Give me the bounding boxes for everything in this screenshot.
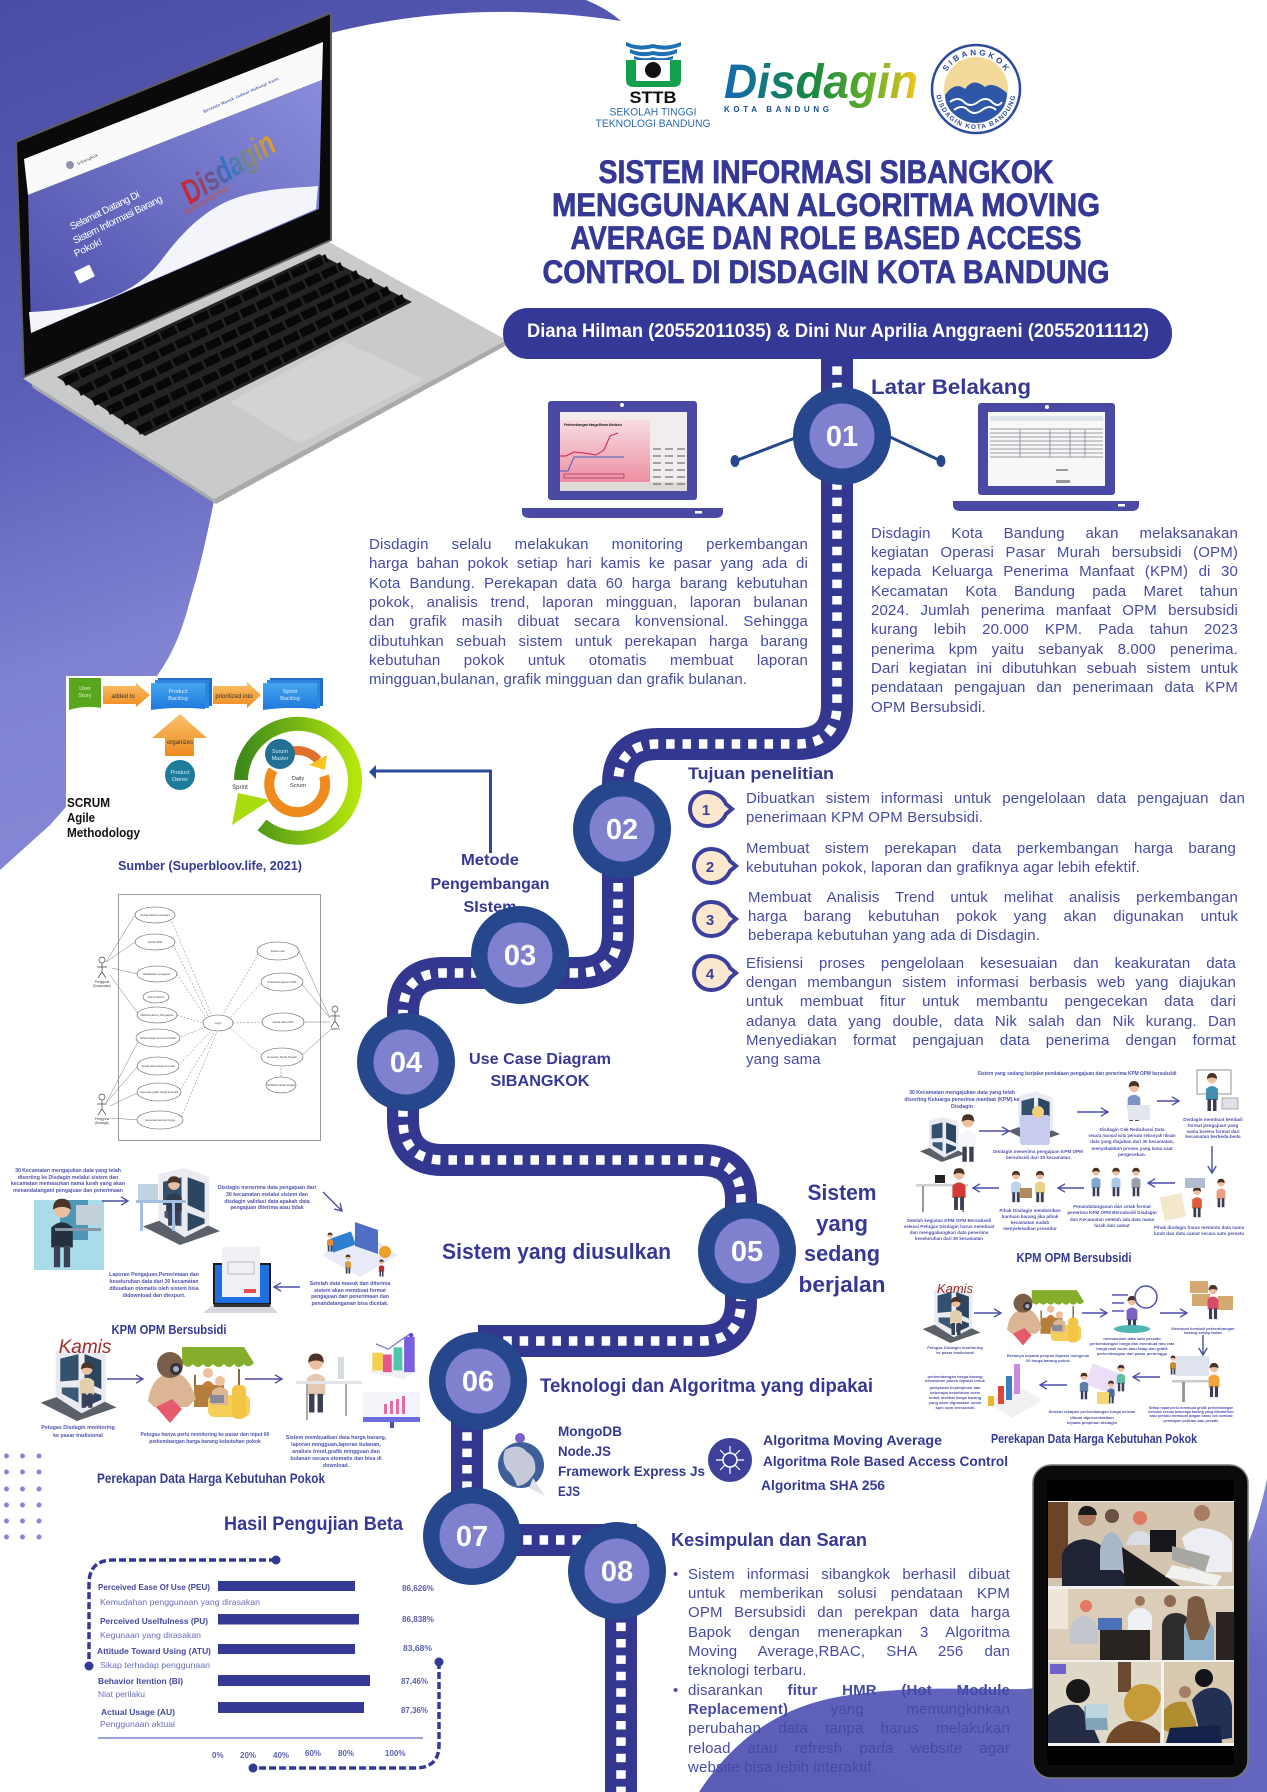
flow panel: running KPM OPM process: Disdagin Cek Redudansi Data <box>1099 1127 1165 1132</box>
diagram: Scrum agile methodology: Backlog <box>168 696 188 702</box>
text block: background right paragraph: OPM Bersubsidi. <box>871 699 986 716</box>
flow panel: proposed KPM OPM system: didownload dan diexport. <box>123 1293 186 1299</box>
bar chart: beta testing results: Kegunaan yang dirasakan <box>100 1630 201 1640</box>
step circle 05 <box>698 1202 796 1300</box>
diagram: Scrum agile methodology: added to <box>111 694 135 700</box>
diagram: Scrum agile methodology: Sprint <box>283 689 298 695</box>
badge 2 <box>694 849 736 883</box>
tech stack list: EJS <box>558 1483 580 1499</box>
step circle 01 <box>793 387 891 485</box>
logo: Sibangkok: SIBANGKOK <box>943 50 1010 72</box>
flow panel: running price recap process: barang setiap bulan <box>1184 1330 1222 1335</box>
heading: Latar Belakang: Latar Belakang <box>871 376 1031 399</box>
step circle 06 <box>429 1332 527 1430</box>
icon: globe <box>498 1433 545 1496</box>
logo: STTB: SEKOLAH TINGGI <box>610 106 696 118</box>
objective 4 text: dengan membangun sistem informasi berbasis web yang diajukan <box>746 974 1236 991</box>
flow panel: proposed KPM OPM system: pengajuan dan penerimaan dan <box>311 1294 389 1300</box>
heading: Metode Pengembangan Sistem <box>430 852 550 916</box>
diagram: use case: kelola harga semua komoditi <box>140 1036 176 1040</box>
text block: background right paragraph: penerima kpm yaitu sebanyak 8.000 penerima. <box>871 641 1238 658</box>
flow panel: running KPM OPM process: selesai Petugas Disdagin harus membuat <box>904 1224 995 1229</box>
flow panel: proposed KPM OPM system: sistem akan membuat format <box>314 1288 386 1294</box>
conclusion bullets: website bisa lebih interaktif. <box>688 1759 876 1776</box>
badge 4: 4 <box>706 966 715 983</box>
flow panel: proposed KPM OPM system: 30 kecamatan melalui sistem dan <box>226 1192 308 1198</box>
flow panel: running price recap process: 60 harga barang pokok <box>1026 1358 1071 1363</box>
diagram: Scrum agile methodology: Master <box>272 756 289 762</box>
text block: background left paragraph: mingguan,bulanan, grafik mingguan dan grafik bulanan. <box>369 671 747 688</box>
tablet with documentation photos <box>1033 1465 1248 1778</box>
flow panel: running price recap process: kembali sesuai beberapa barang yang dibutuhkan <box>1148 1410 1234 1414</box>
objective 3 text: Membuat Analisis Trend untuk melihat analisis perkembangan <box>748 888 1238 906</box>
objective 4 text <box>746 954 1236 1068</box>
step circle 06: 06 <box>462 1366 494 1398</box>
objective 3 text: beberapa kebutuhan yang ada di Disdagin. <box>748 927 1040 944</box>
flow panel: running KPM OPM process <box>904 1070 1245 1265</box>
step circle 05: 05 <box>731 1236 763 1268</box>
bar chart: beta testing results: 60% <box>305 1749 321 1758</box>
step circle 04 <box>357 1013 455 1111</box>
conclusion bullets: Bapok dengan menerapkan 3 Algoritma <box>688 1624 1010 1641</box>
diagram: use case: Kelola data harga komoditi <box>141 1064 175 1068</box>
step circle 04: 04 <box>390 1047 422 1079</box>
flow panel: running KPM OPM process: Setelah kegiatan KPM OPM Bersubsidi <box>907 1218 991 1223</box>
conclusion bullets: perubahan data tanpa harus melakukan <box>688 1720 1010 1737</box>
illustration: laptop mockup <box>16 13 507 504</box>
author pill <box>503 308 1172 359</box>
flow panel: running price recap process: pelayanan kepimpinan dan <box>929 1385 981 1390</box>
flow panel: proposed price recap system <box>40 1333 420 1486</box>
heading: Sistem yang sedang berjalan: berjalan <box>798 1272 886 1297</box>
connector lines from circle 01 <box>730 436 946 467</box>
title: CONTROL DI DISDAGIN KOTA BANDUNG <box>542 254 1110 290</box>
heading: Sistem yang sedang berjalan: yang <box>816 1211 868 1236</box>
step circle 08 <box>568 1522 666 1620</box>
logo: Disdagin: KOTA BANDUNG <box>724 105 829 114</box>
diagram: use case: Generate grafik harga komoditi <box>140 1090 179 1094</box>
bar chart: beta testing results: Actual Usage (AU) <box>101 1707 175 1717</box>
decorative dots <box>4 1454 42 1540</box>
text block: background right paragraph: Kecamatan Kota Bandung pada Maret tahun <box>871 583 1238 600</box>
conclusion bullets: Replacement) yang memungkinkan <box>688 1701 1010 1718</box>
flow panel: proposed price recap system: Sistem membuatkan data harga barang, <box>286 1435 387 1441</box>
step circle 07 <box>423 1487 521 1585</box>
diagram: use case: Login <box>215 1021 222 1025</box>
diagram: use case: Generate laporan harga <box>145 1118 175 1122</box>
flow panel: proposed KPM OPM system: menandatangani pengajuan dan penerimaan <box>13 1188 123 1194</box>
objective 4 text: untuk membuat fitur untuk membantu pengecekan data dari <box>746 993 1236 1010</box>
flow panel: running KPM OPM process: Pihak disdagin harus meminta data nama <box>1154 1225 1245 1230</box>
diagram: Scrum agile methodology: Owner <box>172 777 188 783</box>
flow panel: proposed KPM OPM system: 30 Kecamatan mengajukan data yang telah <box>15 1168 121 1174</box>
objective 3 text: harga barang kebutuhan pokok yang akan digunakan untuk <box>748 908 1238 925</box>
flow panel: running price recap process: Kamis <box>937 1281 974 1296</box>
diagram: use case: (Disdagin) <box>95 1121 109 1125</box>
illustration: laptop mockup: Beranda Masuk Jadwal Hubungi Kami <box>202 76 279 114</box>
flow panel: proposed price recap system: laporan mingguan,laporan bulanan, <box>291 1442 381 1448</box>
diagram: Scrum agile methodology: Agile <box>67 810 95 825</box>
flow panel: running price recap process: Membuat kembali perkembangan <box>1171 1326 1235 1331</box>
heading: Sistem yang diusulkan: Sistem yang diusulkan <box>442 1239 671 1264</box>
flow panel: running price recap process: perekapan polician satu persatu <box>1164 1419 1218 1423</box>
diagram: Scrum agile methodology: Story <box>79 693 92 699</box>
flow panel: running KPM OPM process: kecamatan berbeda-beda <box>1185 1134 1241 1139</box>
heading: Kesimpulan dan Saran: Kesimpulan dan Saran <box>671 1529 867 1550</box>
diagram: use case <box>93 894 340 1140</box>
illustration: laptop mockup: KOTA BANDUNG <box>184 186 231 217</box>
badge 3 <box>694 902 736 936</box>
flow panel: proposed KPM OPM system: Setelah data masuk dan diterima <box>310 1281 390 1287</box>
flow panel: running price recap process: memasukan data satu persatu <box>1103 1336 1161 1341</box>
text block: background right paragraph: Disdagin Kota Bandung akan melaksanakan <box>871 524 1238 542</box>
flow panel: running KPM OPM process: lurah dan data camat secara satu persatu <box>1154 1231 1244 1236</box>
bar chart: beta testing results: Attitude Toward Using (ATU) <box>97 1646 211 1656</box>
flow panel: proposed KPM OPM system: penandatanganan bisa dicetak. <box>312 1301 389 1307</box>
flow panel: running price recap process: yang akan digunakan untuk <box>929 1400 982 1405</box>
heading: Sistem yang sedang berjalan: sedang <box>804 1241 880 1266</box>
diagram: use case: Export Excel <box>148 995 164 999</box>
flow panel: running price recap process: perkembangan harga dan membuat ratu rata <box>1090 1341 1175 1346</box>
step circle 02 <box>573 780 671 878</box>
flow panel: proposed price recap system: analisis trend,grafik mingguan dan <box>292 1449 380 1455</box>
bar chart: beta testing results: 0% <box>212 1751 224 1760</box>
flow panel: running KPM OPM process: bersubsidi dari 30 kecamatan <box>1006 1155 1070 1160</box>
tech stack list: MongoDB <box>558 1423 622 1439</box>
flow panel: running KPM OPM process: Disdagin menerima pengajuan KPM OPM <box>993 1149 1083 1154</box>
text block: background left paragraph: dibutuhkan sebuah sistem untuk perekapan harga barang <box>369 633 808 650</box>
flow panel: running price recap process: Petugas Disdagin monitoring <box>927 1345 983 1350</box>
objective 2 text: Membuat sistem perekapan data perkembangan harga barang <box>746 840 1236 856</box>
step circle 01: 01 <box>826 421 858 453</box>
bar chart: beta testing results: 80% <box>338 1749 354 1758</box>
diagram: use case: Kelola data KPM <box>273 1020 294 1024</box>
heading: Hasil Pengujian Beta: Hasil Pengujian Beta <box>224 1514 403 1535</box>
flow panel: running KPM OPM process: lurah dan camat <box>1094 1223 1130 1228</box>
heading: Use Case Diagram: Use Case Diagram <box>469 1051 611 1068</box>
conclusion bullets: reload atau refresh pada website agar <box>688 1740 1010 1757</box>
logo: Sibangkok <box>930 44 1022 134</box>
badge 1 <box>690 792 732 826</box>
text block: background right paragraph: kurang lebih 20.000 KPM. Pada tahun 2023 <box>871 621 1238 638</box>
objective 2 text: kebutuhan pokok, laporan dan grafiknya agar lebih efektif. <box>746 859 1140 876</box>
bar chart: beta testing results: Penggunaan aktual <box>100 1719 175 1729</box>
bar chart: beta testing results <box>84 1556 444 1772</box>
flow panel: running KPM OPM process: penerima KPM OPM Bersubsidi Disdagin <box>1067 1210 1157 1215</box>
text block: background right paragraph <box>871 524 1238 716</box>
step circle 08: 08 <box>601 1556 633 1588</box>
algorithm list: Algoritma Moving Average <box>763 1432 942 1448</box>
text block: background left paragraph <box>369 536 808 688</box>
diagram: use case: (Kecamatan) <box>93 984 111 988</box>
flow panel: running KPM OPM process: Pihak Disdagin memberikan <box>999 1208 1061 1213</box>
diagram: Scrum agile methodology: prioritized into <box>215 694 253 700</box>
heading: Metode Pengembangan Sistem: Pengembangan <box>430 876 550 893</box>
conclusion bullets: untuk memberikan solusi pendataan KPM <box>688 1585 1010 1602</box>
title: MENGGUNAKAN ALGORITMA MOVING <box>552 187 1100 223</box>
flow panel: running KPM OPM process: kecamatan sudah <box>1011 1220 1049 1225</box>
flow panel: proposed price recap system: Perekapan Data Harga Kebutuhan Pokok <box>97 1470 325 1486</box>
flow panel: running KPM OPM process: sama karena format dari <box>1186 1129 1240 1134</box>
bar chart: beta testing results: Perceived Ease Of Use (PEU) <box>98 1582 210 1592</box>
text block: background right paragraph: 2024. Jumlah penerima manfaat OPM bersubsidi <box>871 602 1238 619</box>
illustration: laptop mockup: Disdagin <box>174 124 282 212</box>
flow panel: running KPM OPM process: dan menggabungkan data penerima <box>910 1230 989 1235</box>
icon: laptop with price chart <box>522 401 723 518</box>
icon: laptop with price chart: Perkembangan Harga Beras Medium <box>564 422 622 427</box>
bar chart: beta testing results: Perceived Uselfulness (PU) <box>100 1616 208 1626</box>
bar chart: beta testing results: 87,36% <box>401 1706 428 1715</box>
flow panel: proposed price recap system: Petugas Disdagin monitoring <box>41 1425 115 1431</box>
heading: Teknologi dan Algoritma: Teknologi dan Algoritma yang dipakai <box>540 1376 873 1397</box>
bar chart: beta testing results: Sikap terhadap penggunaan <box>100 1660 210 1670</box>
flow panel: proposed price recap system: perkembangan harga barang kebutuhan pokok <box>149 1439 261 1445</box>
flow panel: running KPM OPM process: data yang diajukan dari 30 kecamatan, <box>1090 1139 1174 1144</box>
flow panel: running KPM OPM process: dan Kecamatan setelah ada data nama <box>1070 1217 1155 1222</box>
flow panel: running KPM OPM process: Disdagin membuat kembali <box>1183 1117 1243 1122</box>
tech stack list: Node.JS <box>558 1443 611 1459</box>
diagram: use case: Kelola Data Kecamatan <box>140 913 170 917</box>
diagram: Scrum agile methodology: User <box>79 686 91 692</box>
diagram: Scrum agile methodology: Backlog <box>280 696 300 702</box>
flow panel: proposed KPM OPM system: keseluruhan data dari 30 kecamatan <box>109 1279 199 1285</box>
flow panel: proposed KPM OPM system: Disdagin menerima data pengajuan dari <box>218 1185 317 1191</box>
diagram: Scrum agile methodology: Product <box>171 770 190 776</box>
flow panel: proposed KPM OPM system: Laporan Pengajuan,Penerimaan dan <box>109 1272 199 1278</box>
flow panel: running price recap process: satu persatu membuat jangan harus cek kembali <box>1149 1414 1233 1418</box>
diagram: use case: Kelola User <box>271 949 285 953</box>
text block: background right paragraph: kepada Keluarga Penerima Manfaat (KPM) di 30 <box>871 563 1238 580</box>
text block: background left paragraph: pokok, analisis trend, laporan mingguan, laporan bulanan <box>369 594 808 611</box>
conclusion bullets: teknologi terbaru. <box>688 1662 807 1679</box>
algorithm list: Algoritma Role Based Access Control <box>763 1453 1008 1469</box>
flow panel: running KPM OPM process: KPM OPM Bersubsidi <box>1016 1250 1132 1265</box>
diagram: use case: Generate Tanda Tangan <box>267 1055 297 1059</box>
heading: Sistem yang sedang berjalan <box>798 1180 886 1297</box>
flow panel: running KPM OPM process: menyelesaikan prosedur <box>1003 1226 1057 1231</box>
diagram: Scrum agile methodology: Scrum <box>290 783 306 789</box>
flow panel: running KPM OPM process: Penandatanganan dan cetak format <box>1073 1204 1151 1209</box>
logo: Disdagin: Disdagin <box>724 56 918 109</box>
bar chart: beta testing results: Niat perilaku <box>98 1689 145 1699</box>
objective 1 text: penerimaan KPM OPM Bersubsidi. <box>746 809 983 826</box>
conclusion bullets: disarankan fitur HMR (Hot Module <box>688 1682 1010 1699</box>
text block: background left paragraph: dan grafik masih dibuat secara konvensional. Sehingga <box>369 613 808 630</box>
flow panel: proposed price recap system: Kamis <box>59 1337 112 1358</box>
title: SISTEM INFORMASI SIBANGKOK <box>598 154 1054 190</box>
heading: Use Case Diagram: SIBANGKOK <box>490 1073 590 1090</box>
flow panel: proposed price recap system: Petugas hanya perlu monitoring ke pasar dan input 60 <box>141 1432 270 1438</box>
bar chart: beta testing results: 100% <box>385 1749 405 1758</box>
flow panel: running KPM OPM process: pengecekan. <box>1118 1152 1146 1157</box>
flow panel: proposed KPM OPM system: kecamatan memasukan nama lurah yang akan <box>11 1181 125 1187</box>
title <box>542 154 1110 290</box>
bar chart: beta testing results: 86,838% <box>402 1615 434 1624</box>
diagram: Scrum agile methodology: Methodology <box>67 825 141 840</box>
heading: Tujuan penelitian: Tujuan penelitian <box>688 764 834 783</box>
flow panel: running KPM OPM process: keseluruhan dari 30 kecamatan <box>915 1236 983 1241</box>
diagram: Scrum agile methodology: Scrum <box>272 749 288 755</box>
flow panel: running price recap process <box>922 1281 1235 1446</box>
diagram: Scrum agile methodology: Sprint <box>232 785 248 791</box>
badge 4 <box>694 956 736 990</box>
flow panel: proposed price recap system: ke pasar tradisional <box>53 1433 103 1439</box>
flow panel: running KPM OPM process: Disdagin <box>951 1104 973 1110</box>
flow panel: running KPM OPM process: 30 Kecamatan mengajukan data yang telah <box>909 1090 1015 1096</box>
flow panel: running price recap process: dibuat dipresentasikan <box>1070 1415 1114 1420</box>
objective 1 text <box>746 790 1245 826</box>
flow panel: proposed KPM OPM system: disdagin validasi data apakah data <box>224 1199 310 1205</box>
step circle 03: 03 <box>504 940 536 972</box>
conclusion bullets: Moving Average,RBAC, SHA 256 dan <box>688 1643 1010 1660</box>
author pill: Diana Hilman (20552011035) & Dini Nur Aprilia Anggraeni (20552011112) <box>527 320 1149 342</box>
background blob: bottom right <box>699 1479 1267 1792</box>
flow panel: running price recap process: untuk melihat harga barang <box>929 1395 982 1400</box>
flow panel: running price recap process: Bertanya kepada penjual dipasar mengenai <box>1007 1353 1089 1358</box>
heading: Metode Pengembangan Sistem: Metode <box>461 852 519 869</box>
illustration: laptop mockup: Sistem Informasi Barang <box>71 194 164 247</box>
text block: background left paragraph: Kota Bandung. Perekapan data 60 harga barang kebutuhan <box>369 575 808 592</box>
diagram: Scrum agile methodology: organizes <box>167 740 193 746</box>
bar chart: beta testing results: 87,46% <box>401 1677 428 1686</box>
flow panel: running price recap process: Setiap rapat perlu membuat grafik perkembangan <box>1149 1406 1233 1410</box>
illustration: laptop mockup: Selamat Datang Di <box>68 189 142 233</box>
flow panel: proposed KPM OPM system: dibuatkan otomatis oleh sistem bisa <box>109 1286 199 1292</box>
logo: STTB: STTB <box>630 88 676 107</box>
objective 4 text: Menyediakan format pengajuan data penerima dengan format <box>746 1032 1236 1049</box>
logo: STTB <box>596 42 710 130</box>
flow panel: running price recap process: beberapa kebutuhan serta <box>930 1390 981 1395</box>
text block: background right paragraph: pendataan pengajuan dan penerimaan data KPM <box>871 679 1238 696</box>
flow panel: running KPM OPM process: disorting Keluarga penerima manfaat (KPM) ke <box>904 1097 1020 1103</box>
road path <box>403 350 837 1792</box>
flow panel: running price recap process: Perekapan Data Harga Kebutuhan Pokok <box>991 1432 1197 1446</box>
source caption: Sumber (Superbloov.life, 2021) <box>118 858 302 873</box>
bar chart: beta testing results: Kemudahan penggunaan yang dirasakan <box>100 1597 260 1607</box>
diagram: use case: Melakukan pengajuan <box>143 972 171 976</box>
diagram: use case: Kelola KPM <box>148 940 163 944</box>
flow panel: running KPM OPM process: bantuan barang jika pihak <box>1002 1214 1059 1219</box>
diagram: Scrum agile methodology: SCRUM <box>67 795 110 810</box>
bar chart: beta testing results: 83,68% <box>403 1644 432 1653</box>
conclusion bullets: OPM Bersubsidi dan perekpan data harga <box>688 1604 1010 1621</box>
tech stack list: Framework Express Js <box>558 1463 705 1479</box>
flow panel: proposed KPM OPM system: disorting ke Disdagin melalui sistem dan <box>18 1175 118 1181</box>
flow panel: running price recap process: perkembangan harga barang <box>928 1374 983 1379</box>
text block: background left paragraph: kebutuhan pokok untuk otomatis membuat laporan <box>369 652 808 669</box>
illustration: laptop mockup: Sibangkok <box>76 152 99 166</box>
objective 4 text: adanya data yang double, data Nik salah dan Nik kurang. Dan <box>746 1013 1236 1030</box>
flow panel: running price recap process: kpm opm bersubsidi <box>935 1405 975 1410</box>
tech stack list <box>558 1423 705 1499</box>
diagram: use case: Admin <box>330 1027 340 1031</box>
text block: background right paragraph: kegiatan Operasi Pasar Murah bersubsidi (OPM) <box>871 544 1238 561</box>
badge 2: 2 <box>706 859 714 876</box>
objective 2 text <box>746 840 1236 876</box>
text block: background right paragraph: Dari kegiatan ini dibutuhkan sebuah sistem untuk <box>871 660 1238 677</box>
illustration: laptop mockup: Pokok! <box>72 237 104 260</box>
flow panel: proposed KPM OPM system <box>11 1168 398 1337</box>
icon: laptop with spreadsheet <box>953 403 1139 511</box>
step circle 07: 07 <box>456 1521 488 1553</box>
poster: • <box>673 1566 678 1582</box>
flow panel: proposed price recap system: bulanan secara otomatis dan bisa di <box>290 1456 382 1462</box>
flow panel: running price recap process: ke pasar tradisional <box>936 1350 974 1355</box>
bar chart: beta testing results: 40% <box>273 1751 289 1760</box>
diagram: use case: Pengguna <box>95 980 109 984</box>
heading: Metode Pengembangan Sistem: SIstem <box>464 899 516 916</box>
objective 4 text: yang sama <box>746 1051 821 1068</box>
algorithm list: Algoritma SHA 256 <box>761 1477 885 1493</box>
heading: Sistem yang sedang berjalan: Sistem <box>808 1180 876 1205</box>
flow panel: proposed KPM OPM system: KPM OPM Bersubsidi <box>112 1322 226 1337</box>
flow panel: running price recap process: harga naik turun atau tetap dan grafik <box>1096 1346 1169 1351</box>
flow panel: proposed price recap system: download. <box>323 1463 350 1469</box>
objective 4 text: Efisiensi proses pengelolaan kesesuaian dan keakuratan data <box>746 954 1236 972</box>
flow panel: running price recap process: Setelah rekapan perkembangan harga selesai <box>1049 1409 1135 1414</box>
diagram: Scrum agile methodology <box>66 676 355 846</box>
text block: background left paragraph: harga bahan pokok setiap hari kamis ke pasar yang ada di <box>369 555 808 572</box>
step circle 02: 02 <box>606 814 638 846</box>
bar chart: beta testing results: 20% <box>240 1751 256 1760</box>
bar chart: beta testing results: Behavior Itention (BI) <box>98 1676 183 1686</box>
diagram: use case: Melihat History Pengajuan <box>141 1013 174 1017</box>
flow panel: running KPM OPM process: Sistem yang sedang berjalan pendataan pengajuan dan penerima KPM OPM bersubsidi <box>978 1071 1177 1077</box>
flow panel: running KPM OPM process: secara manual satu persatu sebanyak ribuan <box>1088 1133 1176 1138</box>
logo: Sibangkok: DISDAGIN KOTA BANDUNG <box>936 94 1015 129</box>
flow panel: proposed KPM OPM system: pengajuan diterima atau tidak <box>230 1205 304 1211</box>
background blob: top left <box>0 0 621 870</box>
flow panel: running price recap process: kebutuhan pokok dipakai untuk <box>925 1378 986 1383</box>
badge 1: 1 <box>702 802 710 819</box>
poster: • <box>673 1682 678 1698</box>
objective 3 text <box>748 888 1238 944</box>
flow panel: running price recap process: perkembangan dari pasar perminggu <box>1097 1351 1168 1356</box>
heading: Use Case Diagram <box>469 1051 611 1090</box>
badge 3: 3 <box>706 912 714 929</box>
icon: algorithm circuit <box>708 1438 752 1482</box>
flow panel: running KPM OPM process: format pengajuan yang <box>1188 1123 1238 1128</box>
diagram: use case: Kelola Pengajuan KPM <box>268 980 297 984</box>
diagram: Scrum agile methodology: Daily <box>292 776 304 782</box>
diagram: use case: Pengguna <box>95 1117 109 1121</box>
step circle 03 <box>471 906 569 1004</box>
diagram: use case: Verifikasi tanda tangan <box>267 1083 296 1087</box>
flow panel: running KPM OPM process: menyebabkan proses yang lama saat <box>1091 1146 1173 1151</box>
objective 1 text: Dibuatkan sistem informasi untuk pengelolaan data pengajuan dan <box>746 790 1245 806</box>
conclusion bullets <box>673 1566 1010 1776</box>
text block: background left paragraph: Disdagin selalu melakukan monitoring perkembangan <box>369 536 808 553</box>
algorithm list <box>761 1432 1008 1493</box>
title: AVERAGE DAN ROLE BASED ACCESS <box>570 220 1082 256</box>
bar chart: beta testing results: 86,626% <box>402 1584 434 1593</box>
arrow: method to Scrum diagram <box>369 765 490 853</box>
flow panel: running price recap process: kepada pimpinan disdagin <box>1067 1420 1118 1425</box>
diagram: Scrum agile methodology: Product <box>169 689 188 695</box>
conclusion bullets: Sistem informasi sibangkok berhasil dibuat <box>688 1566 1010 1582</box>
logo: STTB: TEKNOLOGI BANDUNG <box>596 118 710 130</box>
